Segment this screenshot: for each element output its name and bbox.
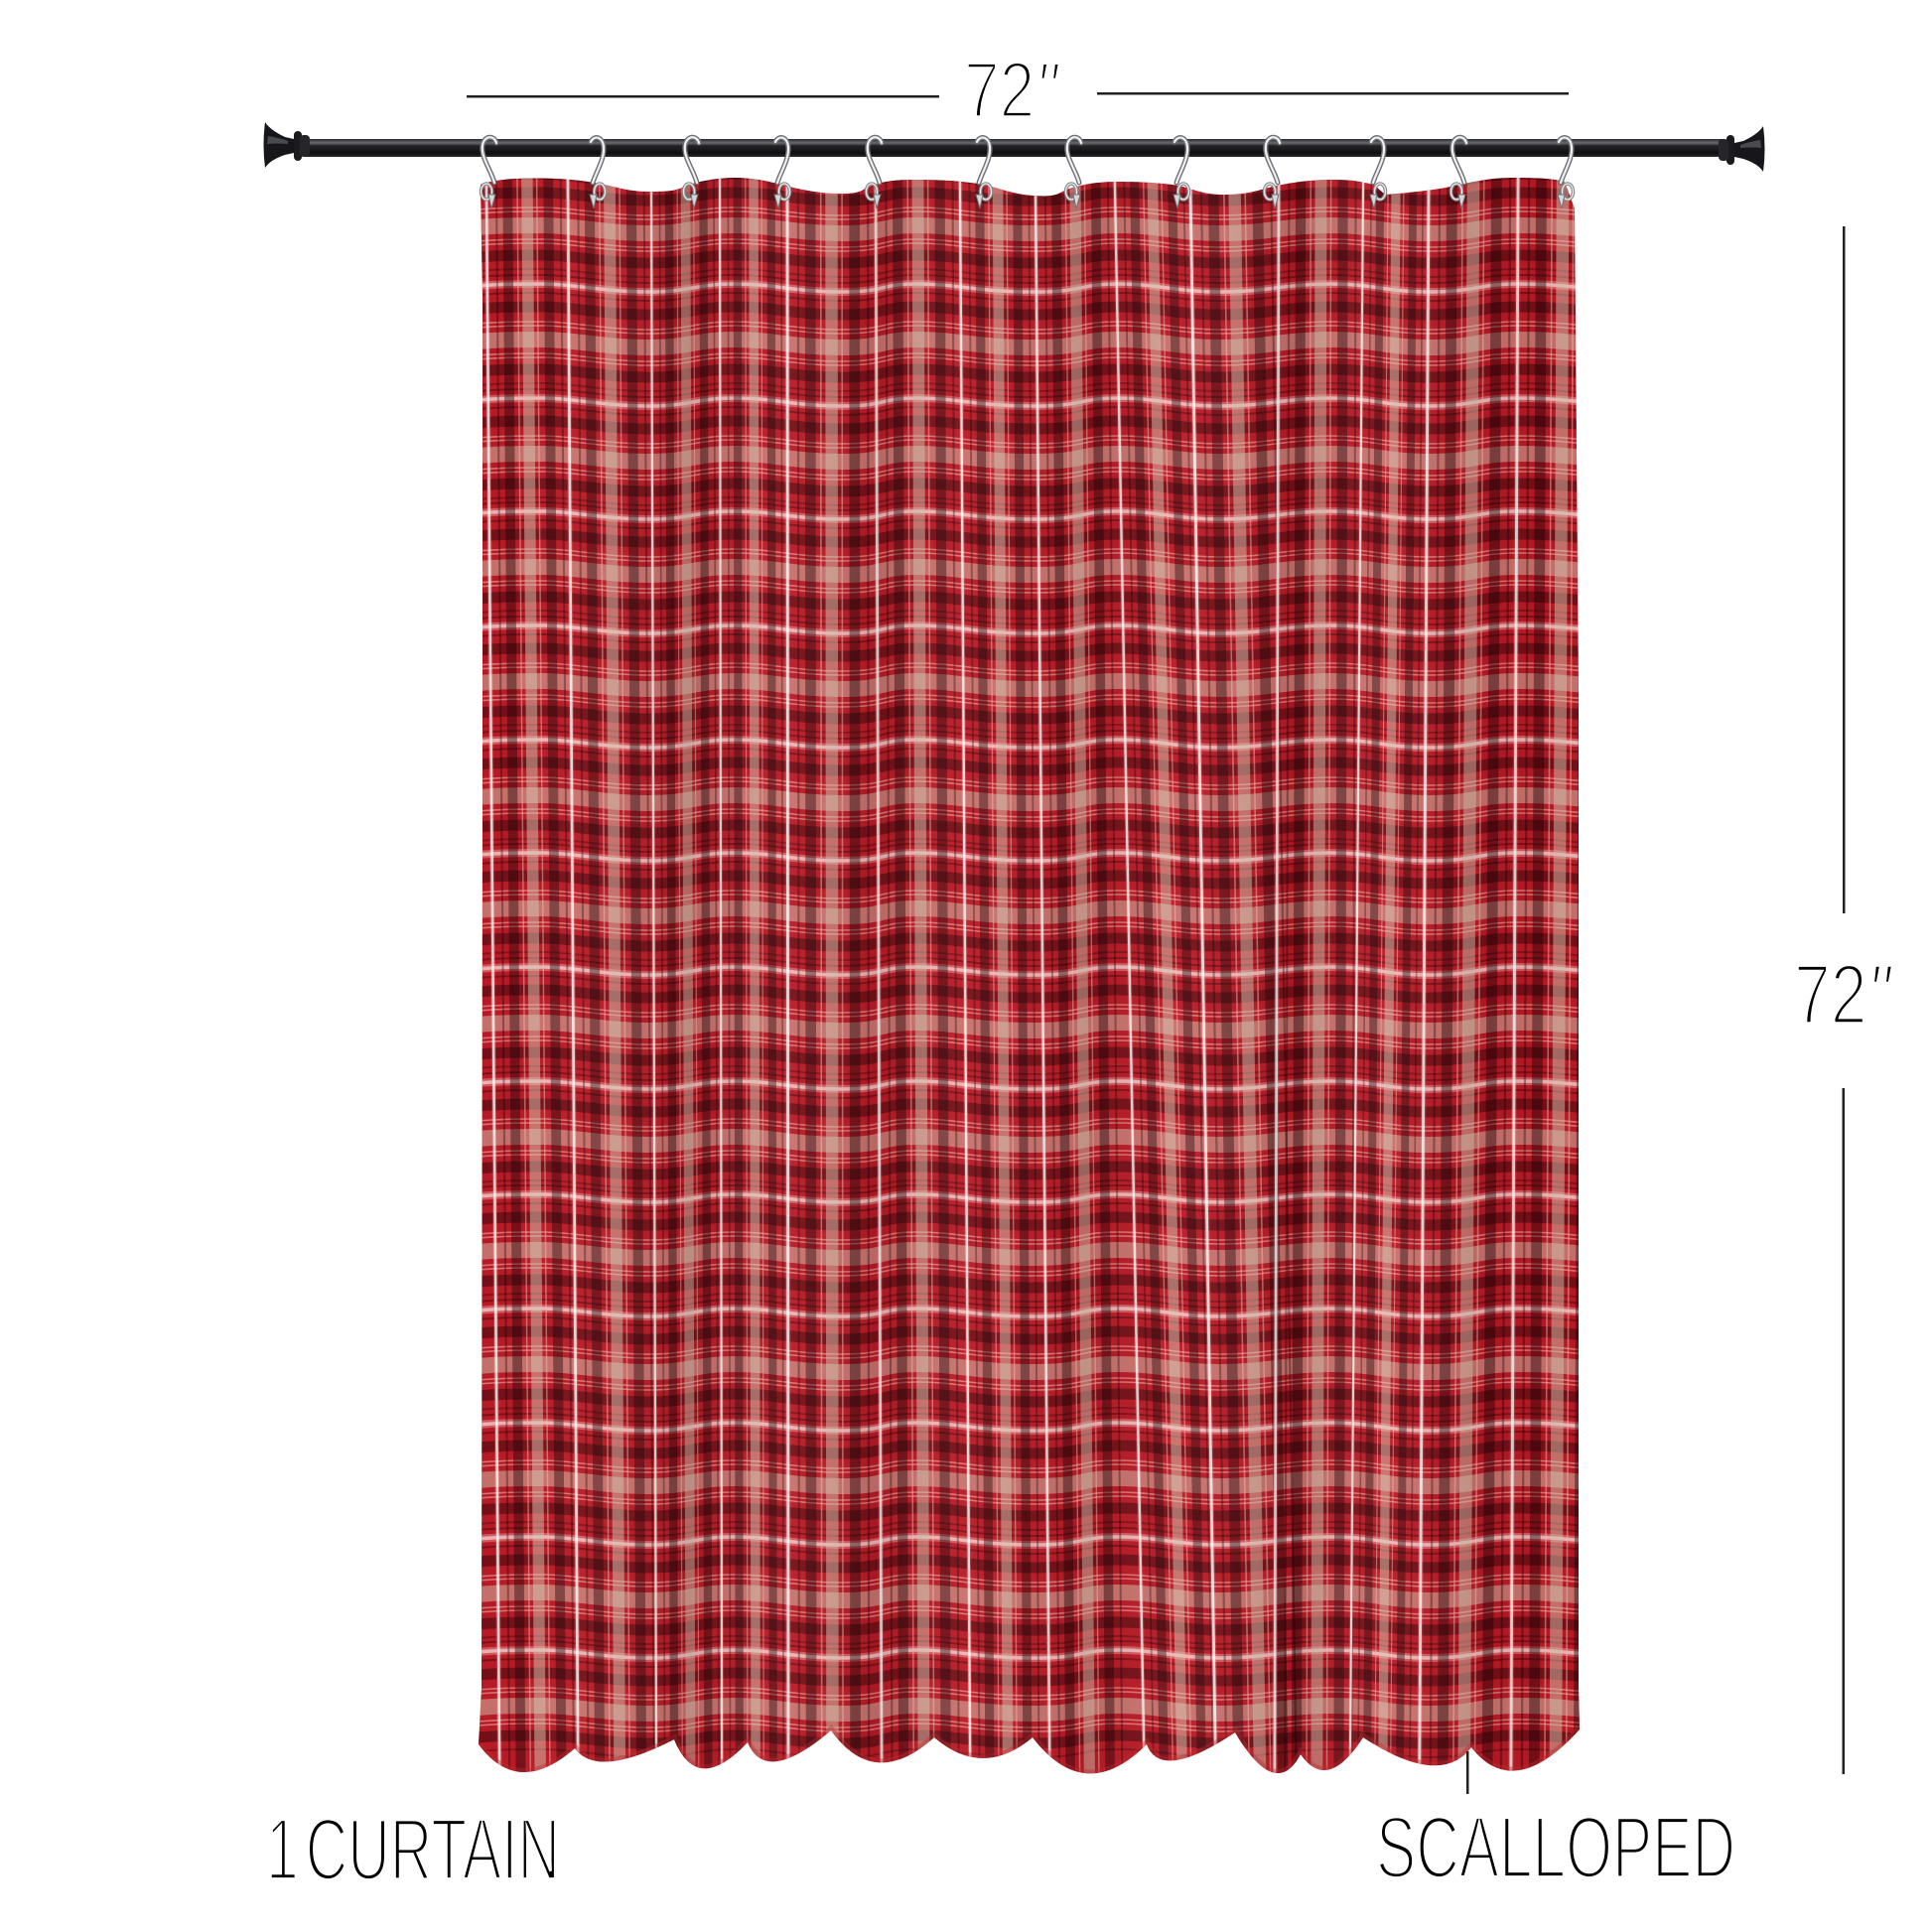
curtain rod: [264, 122, 1765, 172]
left rod finial: [264, 122, 310, 168]
scalloped hem: [479, 1729, 1580, 1773]
right rod finial: [1719, 126, 1765, 172]
width label: 72": [964, 46, 1060, 134]
shower curtain with plaid fabric: [479, 178, 1580, 1773]
height label: 72": [1794, 948, 1893, 1042]
label: 1 curtain: 1 CURTAIN: [266, 1800, 560, 1898]
scalloped callout tick: [1466, 1751, 1469, 1794]
plaid fabric: [479, 178, 1580, 1773]
label: scalloped: SCALLOPED: [1376, 1798, 1735, 1896]
infographic canvas: [264, 64, 1891, 1878]
shower curtain hooks: [481, 137, 1573, 208]
